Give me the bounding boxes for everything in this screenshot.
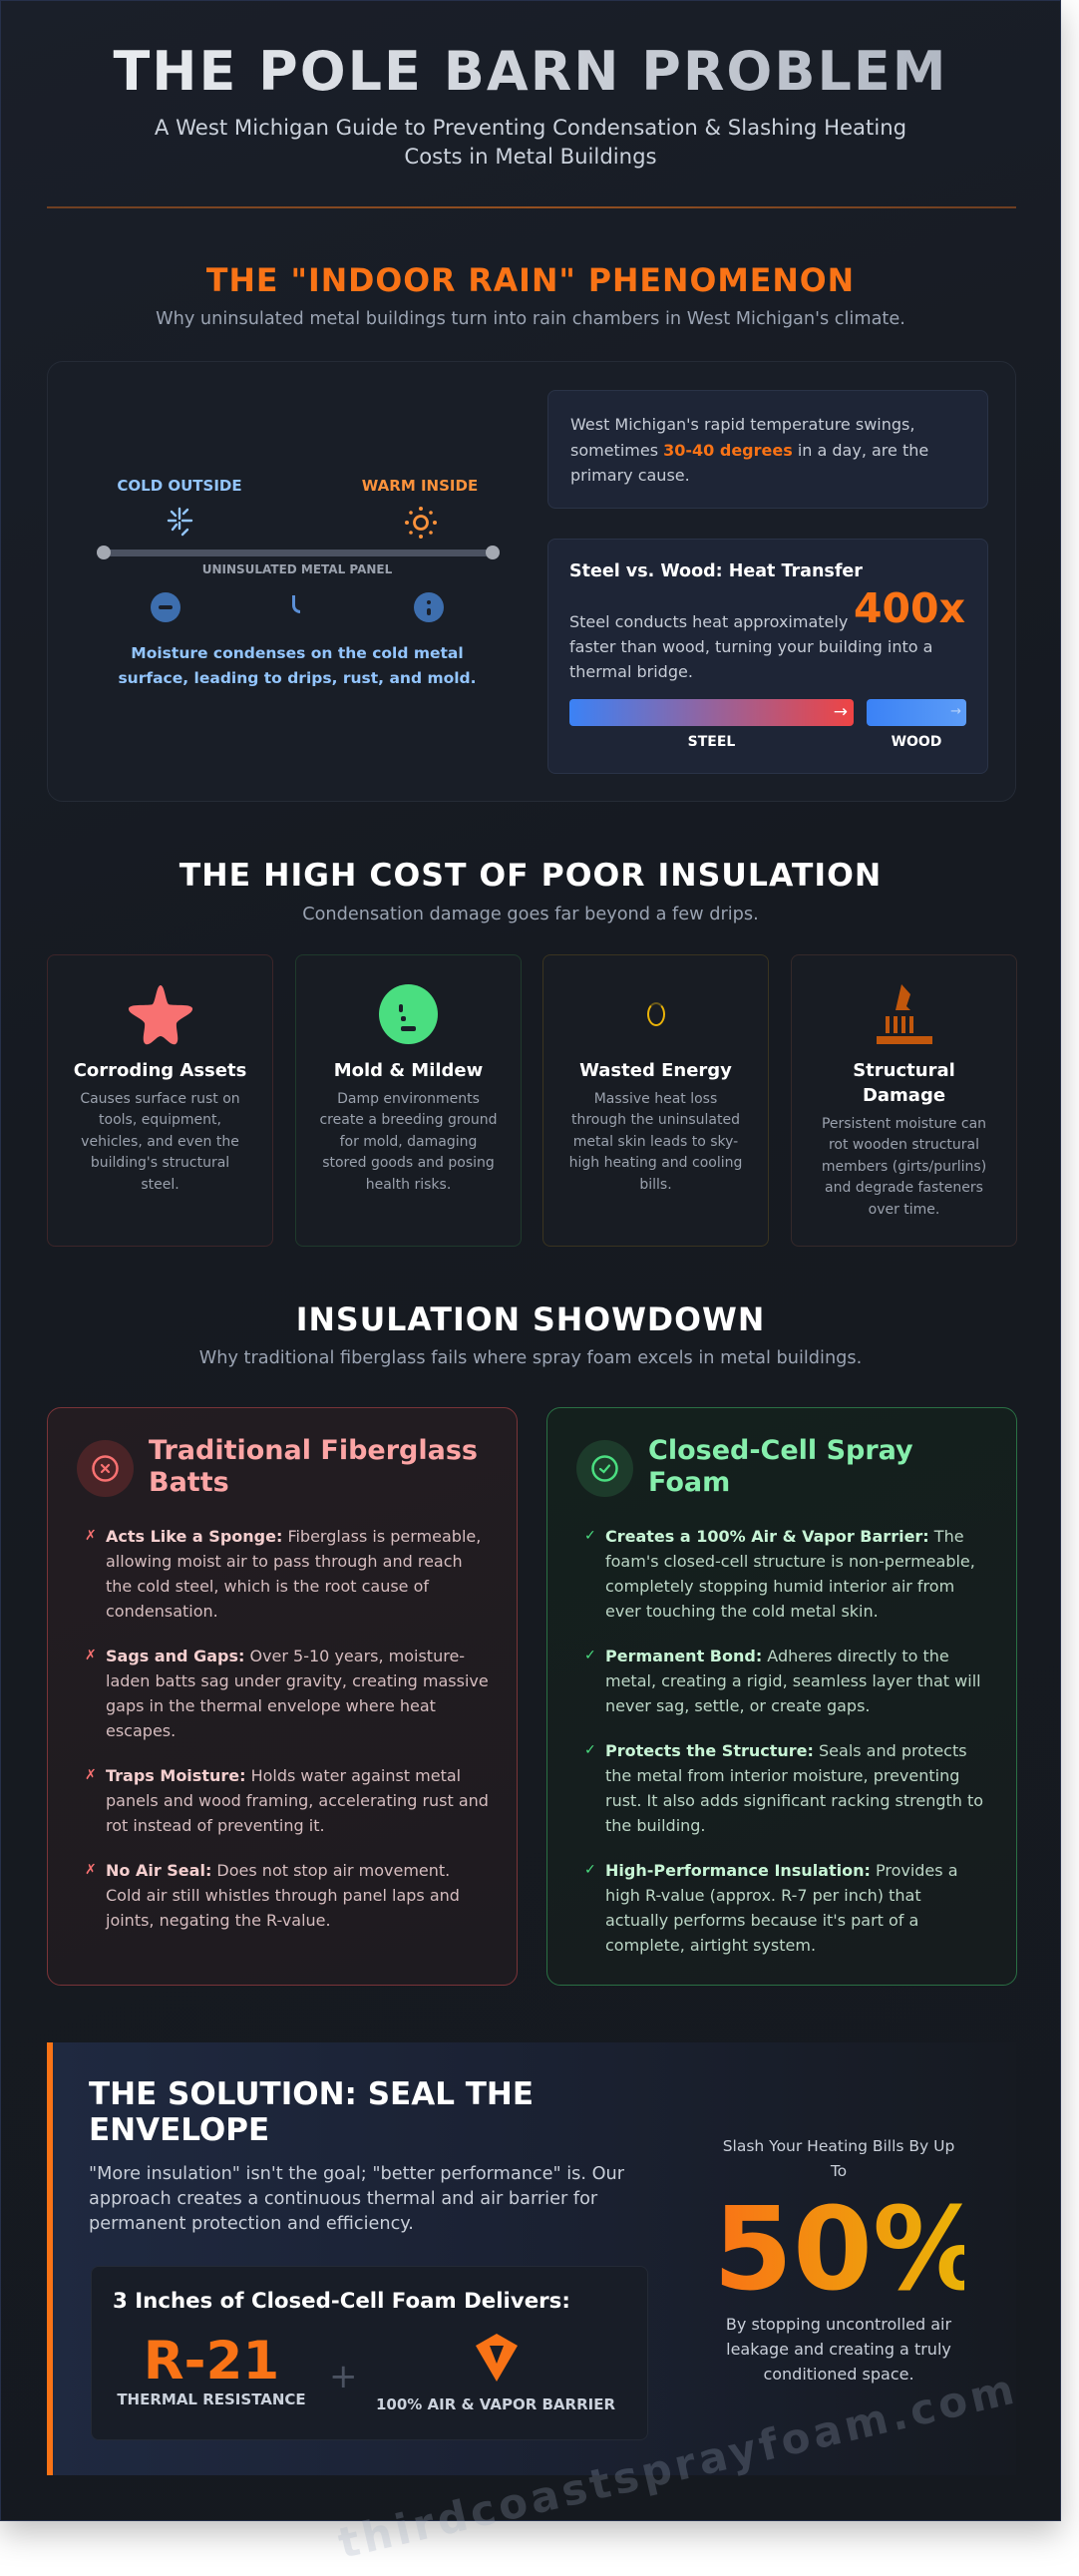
box: foam delivers — [91, 2266, 648, 2440]
heading: fiberglass — [149, 1435, 478, 1498]
list: spray foam benefits: Permanent Bond: Adheres directly to the metal, creating a rigid, seamless layer that will never sag, settle, or create gaps. — [605, 1647, 981, 1715]
panel: the solution — [47, 2042, 1016, 2475]
icon: check circle — [576, 1440, 633, 1497]
heading: spray foam: Closed-Cell Spray — [648, 1435, 913, 1466]
panel: fiberglass batts — [47, 1407, 518, 1986]
card: mold and mildew — [295, 954, 522, 1247]
diagram: metal panel condensation — [97, 477, 500, 687]
subheading: high cost: Condensation damage goes far beyond a few drips. — [302, 905, 759, 924]
icon: snowflake — [168, 507, 193, 537]
subtitle: A West Michigan Guide to Preventing Condensation & Slashing Heating — [155, 115, 906, 140]
callout: steel vs wood — [547, 539, 988, 774]
bar: wood — [867, 699, 966, 726]
list: spray foam benefits: High-Performance Insulation: Provides a high R-value (approx. R-7 per inch) that actually performs because it's part of a complete, airtight system. — [605, 1861, 957, 1955]
callout: temperature swings: West Michigan's rapid temperature swings, sometimes 30-40 degrees in a day, are the primary cause. — [570, 415, 928, 485]
text: moisture condenses: Moisture condenses on the cold metal — [131, 644, 464, 662]
panel: indoor rain — [47, 361, 1016, 802]
callout: temperature swings — [547, 390, 988, 509]
icon: structure — [877, 984, 932, 1044]
panel: fiberglass batts: ✗ — [85, 1862, 97, 1878]
icon: star — [128, 985, 193, 1045]
text: by stopping: By stopping uncontrolled air leakage and creating a truly conditioned space. — [726, 2315, 951, 2384]
heading: 3 inches: 3 Inches of Closed-Cell Foam Delivers: — [113, 2289, 570, 2314]
panel: fiberglass batts: ✗ — [85, 1648, 97, 1663]
panel: closed-cell spray foam: ✓ — [584, 1528, 596, 1544]
subheading: insulation showdown: Why traditional fiberglass fails where spray foam excels in metal buildings. — [199, 1348, 862, 1368]
icon: sun — [405, 507, 437, 539]
text: better performance: "More insulation" isn't the goal; "better performance" is. Our approach creates a continuous thermal and air barrier for permanent protection and efficiency. — [89, 2164, 624, 2234]
label: uninsulated metal panel: UNINSULATED METAL PANEL — [202, 562, 392, 576]
card: structural damage: Persistent moisture can rot wooden structural members (girts/purlins) and degrade fasteners over time. — [822, 1116, 986, 1218]
label: thermal resistance: THERMAL RESISTANCE — [117, 2391, 306, 2408]
label: steel: STEEL — [688, 734, 735, 750]
label: air vapor barrier: 100% AIR & VAPOR BARRIER — [376, 2395, 615, 2413]
list: fiberglass problems: Acts Like a Sponge: Fiberglass is permeable, allowing moist air to pass through and reach the cold steel, which is the root cause of condensation. — [106, 1527, 481, 1621]
icon: mold — [379, 984, 438, 1044]
heading: the solution: ENVELOPE — [89, 2112, 269, 2148]
list: spray foam benefits — [584, 1527, 983, 1955]
bar: steel: → — [834, 702, 848, 722]
card: structural damage: Structural — [853, 1060, 955, 1081]
heading: insulation showdown: INSULATION SHOWDOWN — [296, 1302, 765, 1338]
card: structural damage: Damage — [863, 1085, 945, 1106]
heading: fiberglass: Batts — [149, 1467, 229, 1498]
list: spray foam benefits: Creates a 100% Air & Vapor Barrier: The foam's closed-cell structure is non-permeable, completely stopping humid interior air from ever touching the cold metal skin. — [605, 1527, 975, 1621]
card: structural damage — [791, 954, 1017, 1247]
list: fiberglass problems: No Air Seal: Does not stop air movement. Cold air still whistles through panel laps and joints, negating the R-value. — [106, 1861, 460, 1930]
panel: closed-cell spray foam — [546, 1407, 1017, 1986]
text: steel conducts: Steel conducts heat approximately — [569, 612, 848, 631]
bar: steel — [569, 699, 854, 726]
text: moisture condenses — [118, 644, 477, 687]
card: corroding assets: Corroding Assets — [74, 1060, 246, 1081]
list: spray foam benefits: Protects the Structure: Seals and protects the metal from interior moisture, preventing rust. It also adds significant racking strength to the building. — [605, 1741, 983, 1835]
panel: fiberglass batts: ✗ — [85, 1767, 97, 1783]
heading: spray foam — [648, 1435, 913, 1498]
text: moisture condenses: surface, leading to drips, rust, and mold. — [118, 669, 477, 687]
text: steel conducts: thermal bridge. — [569, 662, 693, 681]
card: wasted energy: Wasted Energy — [579, 1060, 732, 1081]
list: fiberglass problems — [85, 1527, 489, 1930]
list: fiberglass problems: Sags and Gaps: Over 5-10 years, moisture-laden batts sag under gravity, creating massive gaps in the thermal envelope where heat escapes. — [106, 1647, 489, 1740]
heading: high cost: THE HIGH COST OF POOR INSULATION — [180, 858, 882, 894]
text: steel conducts: faster than wood, turning your building into a — [569, 637, 932, 656]
card: wasted energy: Massive heat loss through the uninsulated metal skin leads to sky-high heating and cooling bills. — [569, 1091, 742, 1193]
card: corroding assets: Causes surface rust on tools, equipment, vehicles, and even the building's structural steel. — [80, 1091, 240, 1193]
bar: wood: → — [950, 704, 961, 719]
heading: indoor rain: THE "INDOOR RAIN" PHENOMENON — [206, 263, 855, 299]
subtitle: Costs in Metal Buildings — [404, 144, 657, 169]
icons: droplets — [151, 592, 180, 622]
panel: closed-cell spray foam: ✓ — [584, 1862, 596, 1878]
title: THE POLE BARN PROBLEM — [113, 40, 948, 103]
heading: steel vs wood: Steel vs. Wood: Heat Transfer — [569, 561, 863, 581]
text: steel conducts — [569, 612, 932, 681]
heading: the solution — [89, 2076, 534, 2148]
heading: spray foam: Foam — [648, 1467, 730, 1498]
panel: closed-cell spray foam: ✓ — [584, 1648, 596, 1663]
label: cold outside: COLD OUTSIDE — [117, 477, 242, 495]
panel: fiberglass batts: ✗ — [85, 1528, 97, 1544]
card: wasted energy — [542, 954, 769, 1247]
label: warm inside: WARM INSIDE — [362, 477, 478, 495]
card: corroding assets — [47, 954, 273, 1247]
icon: x circle — [77, 1440, 134, 1497]
watermark: thirdcoastsprayfoam.com — [334, 2364, 1022, 2568]
card: mold and mildew: Mold & Mildew — [334, 1060, 483, 1081]
icon: plus: + — [329, 2357, 357, 2396]
callout: slash bills: Slash Your Heating Bills By Up To — [723, 2137, 954, 2180]
panel: closed-cell spray foam: ✓ — [584, 1742, 596, 1758]
icon: energy ring — [647, 1002, 665, 1026]
metal panel bar — [104, 550, 493, 556]
card: mold and mildew: Damp environments create a breeding ground for mold, damaging stored goods and posing health risks. — [319, 1091, 497, 1193]
stat: R-21: R-21 — [144, 2331, 279, 2392]
subtitle — [155, 115, 906, 169]
stat: 400x: 400x — [854, 584, 965, 632]
heading: fiberglass: Traditional Fiberglass — [149, 1435, 478, 1466]
heading: the solution: THE SOLUTION: SEAL THE — [89, 2076, 534, 2112]
subheading: indoor rain: Why uninsulated metal buildings turn into rain chambers in West Michigan's climate. — [156, 309, 905, 329]
list: fiberglass problems: Traps Moisture: Holds water against metal panels and wood framing, accelerating rust and rot instead of preventing it. — [106, 1766, 489, 1835]
icon: shield v — [476, 2334, 518, 2382]
label: wood: WOOD — [892, 734, 941, 750]
